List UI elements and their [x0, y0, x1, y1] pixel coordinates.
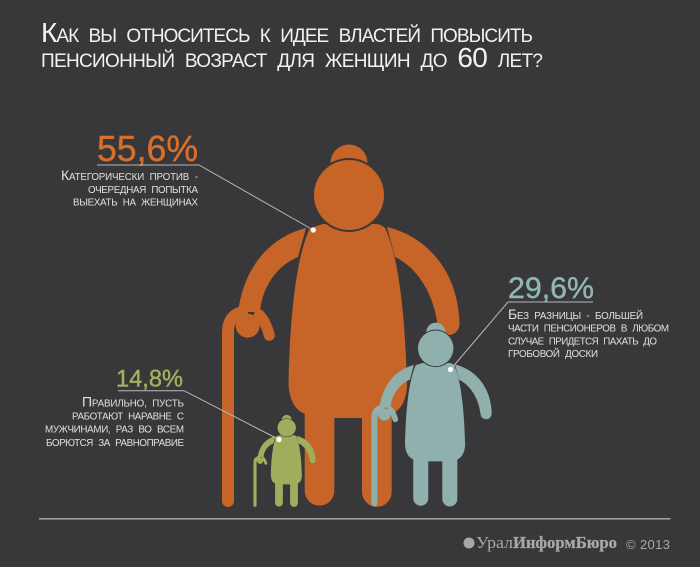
callout: 55,6%: ВЫЕХАТЬ НА ЖЕНЩИНАХ: [73, 198, 198, 208]
callout: 29,6%: БЕЗ РАЗНИЦЫ - БОЛЬШЕЙ: [508, 306, 643, 322]
footer credit: Урал: [476, 533, 514, 552]
title: [41, 17, 543, 73]
callout: 14,8%: [45, 366, 282, 449]
callout: 55,6%: [61, 128, 316, 233]
callout: 55,6%: 55,6%: [97, 128, 198, 169]
callout: 14,8%: ПРАВИЛЬНО, ПУСТЬ: [82, 394, 184, 410]
callout: 29,6%: ЧАСТИ ПЕНСИОНЕРОВ В ЛЮБОМ: [508, 324, 669, 335]
callout: 14,8%: МУЖЧИНАМИ, РАЗ ВО ВСЕМ: [45, 425, 184, 436]
callout: 29,6%: [448, 272, 669, 372]
footer credit: © 2013: [626, 537, 670, 552]
bottom rule: [39, 518, 670, 520]
callout: 14,8%: РАБОТАЮТ НАРАВНЕ С: [72, 412, 184, 422]
title: КАК ВЫ ОТНОСИТЕСЬ К ИДЕЕ ВЛАСТЕЙ ПОВЫСИТЬ: [41, 17, 533, 48]
title: ПЕНСИОННЫЙ ВОЗРАСТ ДЛЯ ЖЕНЩИН ДО 60 ЛЕТ?: [41, 42, 543, 73]
figure: small green woman with cane: [255, 415, 316, 507]
callout: 29,6%: 29,6%: [508, 272, 594, 305]
figure: teal woman with cane: [374, 323, 492, 506]
callout: 55,6%: КАТЕГОРИЧЕСКИ ПРОТИВ -: [61, 167, 198, 183]
callout: 55,6%: ОЧЕРЕДНАЯ ПОПЫТКА: [88, 185, 198, 196]
callout: 29,6%: ГРОБОВОЙ ДОСКИ: [508, 348, 598, 360]
callout: 29,6%: СЛУЧАЕ ПРИДЕТСЯ ПАХАТЬ ДО: [508, 336, 657, 348]
footer credit: [464, 533, 670, 552]
footer credit: ИнформБюро: [513, 533, 617, 552]
callout: 14,8%: БОРЮТСЯ ЗА РАВНОПРАВИЕ: [46, 438, 184, 449]
callout: 14,8%: 14,8%: [116, 366, 183, 393]
figure: large orange woman with cane: [228, 144, 460, 507]
